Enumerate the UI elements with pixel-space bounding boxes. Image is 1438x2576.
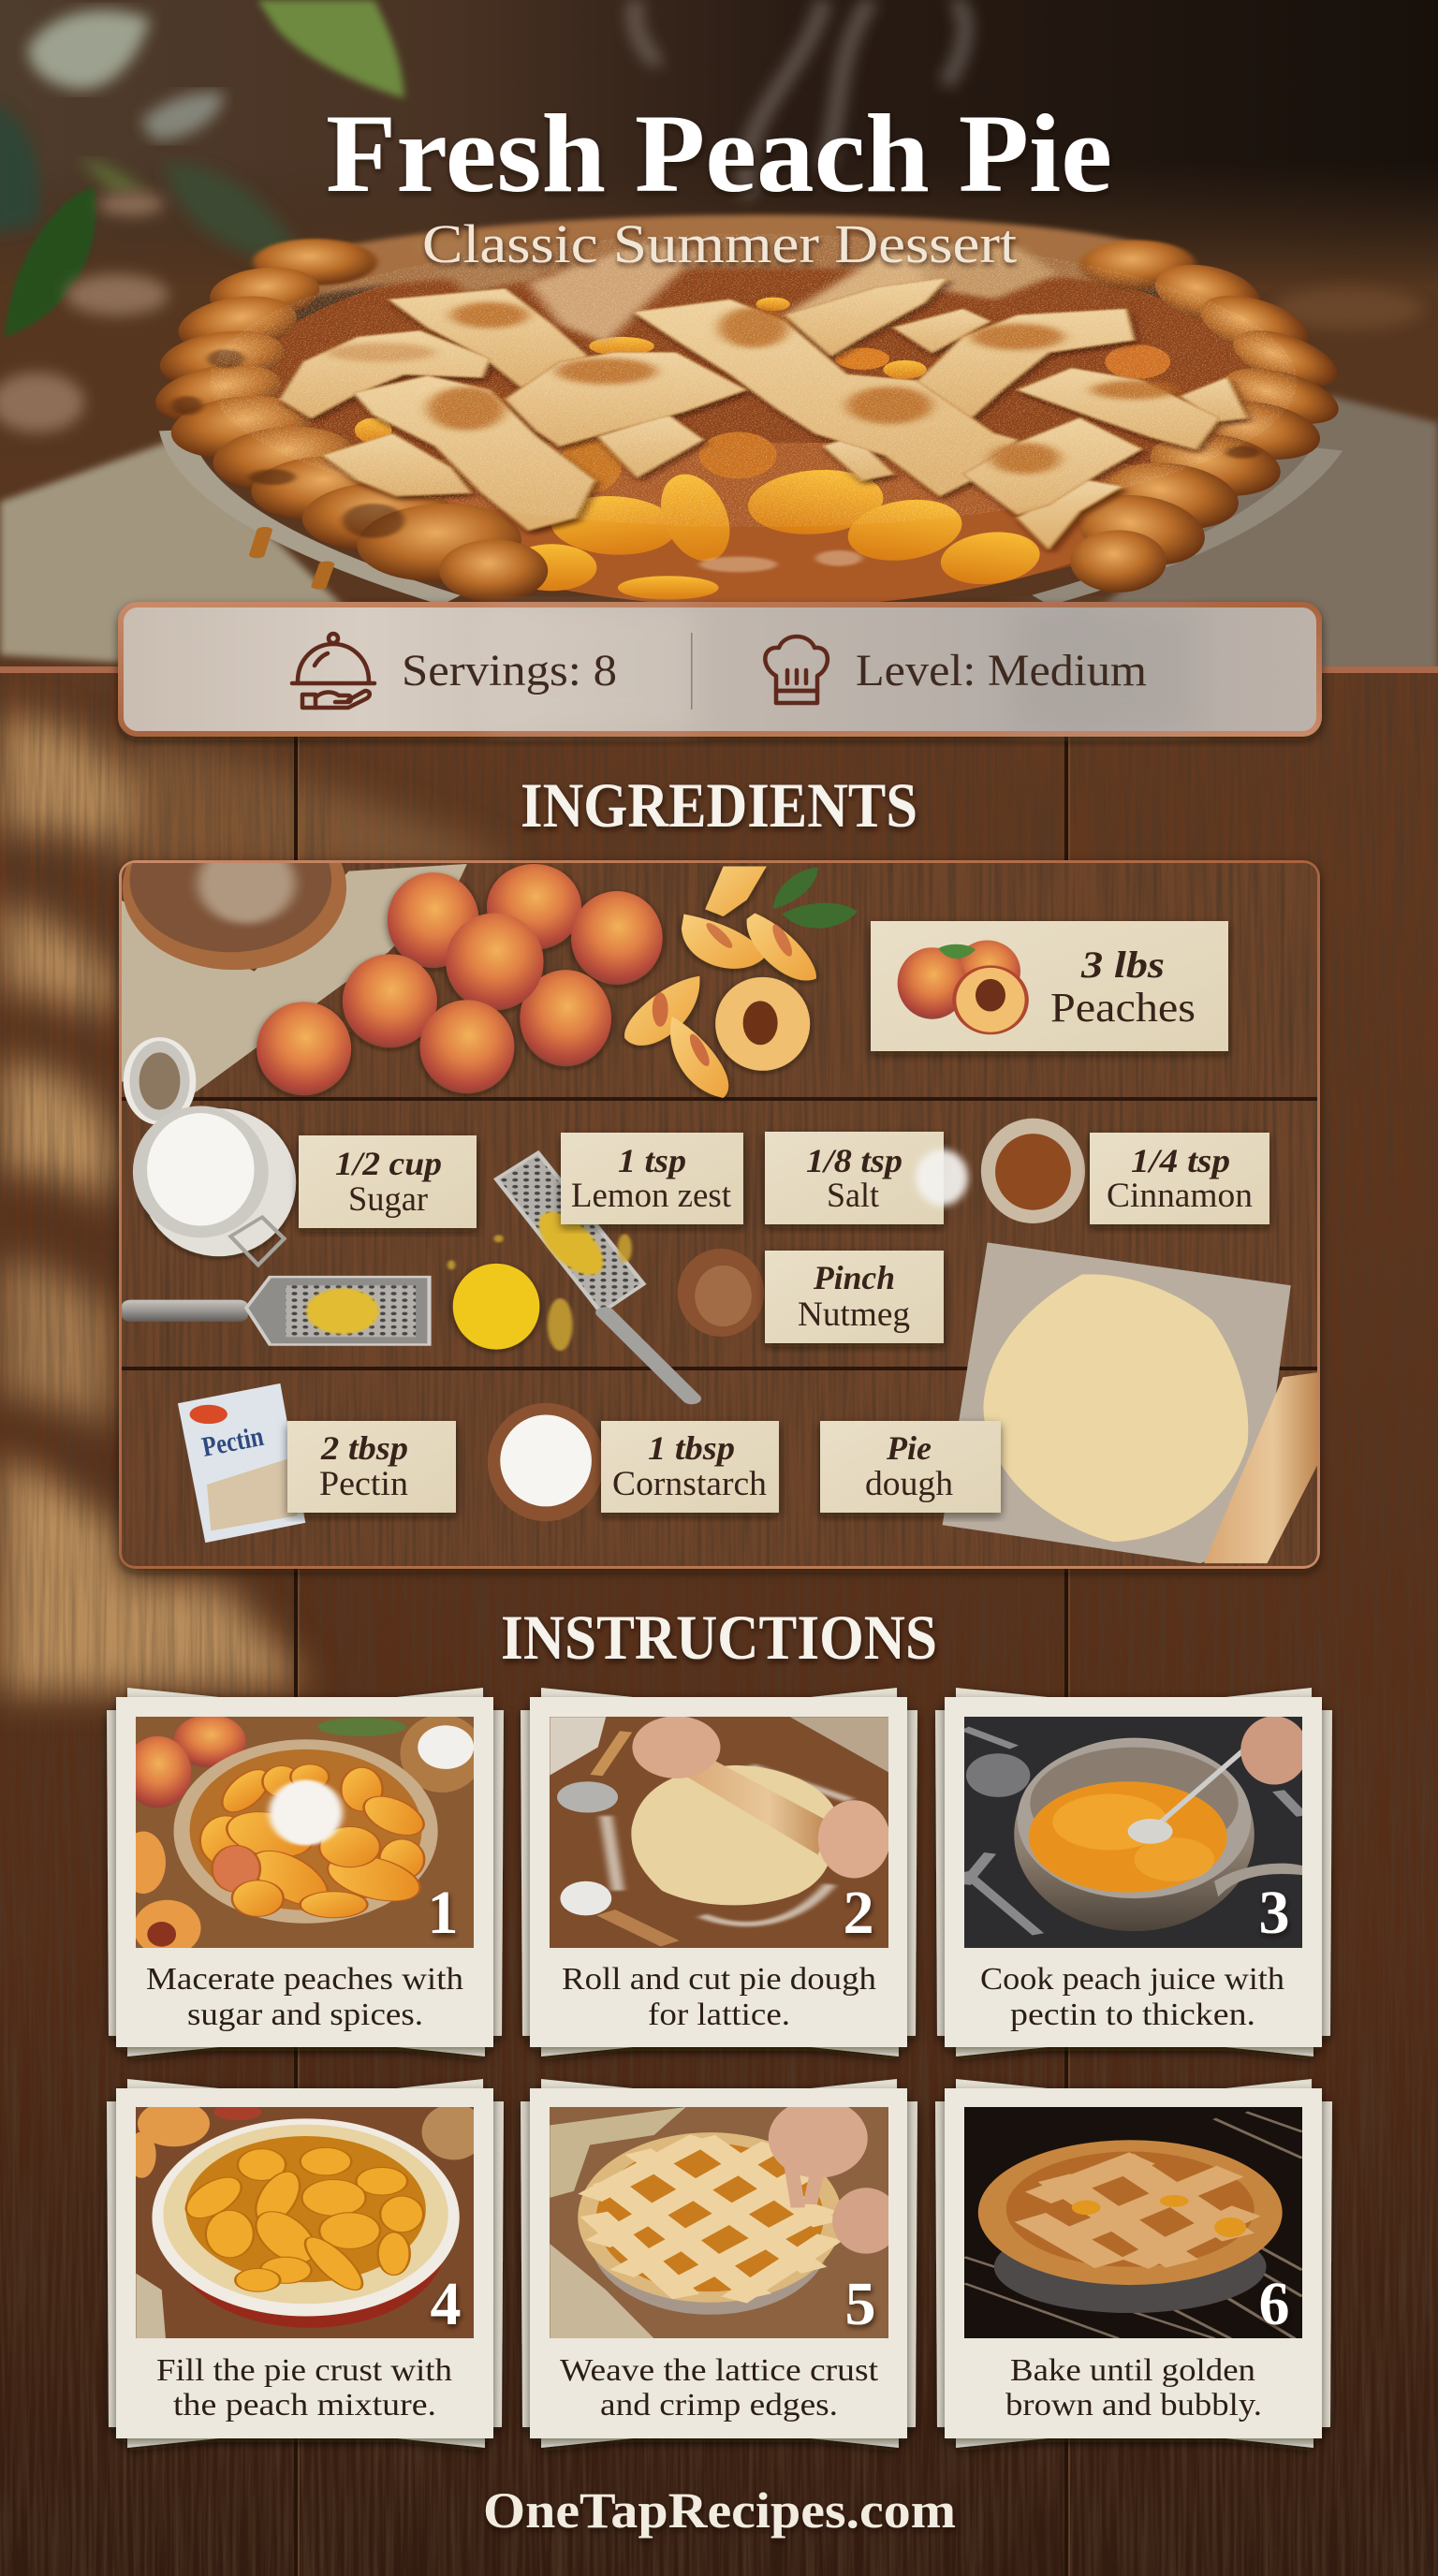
icon: nutmeg bowl xyxy=(678,1249,764,1337)
ingredient label: nutmeg xyxy=(765,1251,944,1343)
hero photo: fresh peach pie on a table xyxy=(0,0,1438,674)
step text: the peach mixture. xyxy=(173,2388,436,2422)
icon: flat grater with zest xyxy=(122,1277,429,1345)
step card 5 xyxy=(521,2079,917,2448)
step card 3 xyxy=(935,1688,1332,2056)
cloth xyxy=(0,396,1438,674)
ingredient label: sugar xyxy=(299,1135,477,1228)
ingredient label: 3 lbs peaches: 3 lbs xyxy=(1080,944,1165,986)
ingredient label: pectin: 2 tbsp xyxy=(320,1429,408,1467)
icon: serving cloche on a hand xyxy=(292,634,374,708)
divider xyxy=(691,633,693,710)
ingredient label: cinnamon: Cinnamon xyxy=(1107,1177,1253,1215)
subtitle: Classic Summer Dessert xyxy=(422,213,1017,274)
icon: lemon xyxy=(453,1264,539,1350)
icon: rolling pin xyxy=(1204,1372,1318,1563)
icon: cornstarch bowl xyxy=(488,1403,604,1521)
step text: Macerate peaches with xyxy=(146,1962,463,1997)
photo: peaches macerating in a bowl xyxy=(121,1715,483,1956)
tin rim xyxy=(174,431,1328,600)
photo: filled pie crust xyxy=(127,2100,486,2338)
ingredient label: lemon zest xyxy=(561,1133,743,1224)
icon: pectin packet xyxy=(178,1383,305,1543)
panel: servings and level banner xyxy=(121,605,1319,734)
step text xyxy=(156,2353,452,2422)
step card 2 xyxy=(521,1688,917,2056)
footer website: OneTapRecipes.com xyxy=(483,2482,956,2539)
icon: wooden bowl xyxy=(123,806,346,970)
photo: rolling pie dough xyxy=(550,1716,890,1948)
step text xyxy=(562,1962,876,2032)
panel: ingredients board xyxy=(119,806,1320,1569)
dappled sunlight on wood xyxy=(0,716,524,1694)
step text: Cook peach juice with xyxy=(980,1962,1284,1997)
step text xyxy=(1005,2353,1262,2422)
heading: instructions: INSTRUCTIONS xyxy=(501,1602,937,1673)
ingredient label: 3 lbs peaches xyxy=(871,921,1228,1051)
icon: blurred leaves behind the pie xyxy=(0,0,404,337)
icon: linen cloth xyxy=(120,864,467,1095)
step number: 6 xyxy=(1258,2270,1290,2338)
step number: 5 xyxy=(844,2270,876,2338)
ingredient label: lemon zest: Lemon zest xyxy=(571,1177,732,1215)
ingredient label: cornstarch: 1 tbsp xyxy=(648,1429,735,1467)
ingredient label: cinnamon: 1/4 tsp xyxy=(1131,1142,1230,1179)
step text: Weave the lattice crust xyxy=(560,2353,879,2388)
ingredient label: cornstarch: Cornstarch xyxy=(612,1465,767,1503)
zest crumbs xyxy=(448,1234,632,1351)
photo: pie baking in the oven xyxy=(964,2107,1302,2338)
ingredient label: cinnamon xyxy=(1090,1133,1269,1224)
step text: sugar and spices. xyxy=(187,1998,423,2032)
panel: ingredients board: Pectin xyxy=(199,1421,266,1463)
step card 6 xyxy=(935,2079,1332,2448)
title: Fresh Peach Pie xyxy=(326,91,1112,215)
crimped crust lobes xyxy=(129,239,1362,602)
step text: pectin to thicken. xyxy=(1010,1998,1255,2032)
ingredient label: 3 lbs peaches: Peaches xyxy=(1050,985,1196,1031)
ingredient label: pie dough xyxy=(820,1421,1001,1513)
icon: salt pile xyxy=(916,1149,968,1206)
ingredient label: pie dough: Pie xyxy=(886,1429,932,1467)
step text: brown and bubbly. xyxy=(1005,2388,1262,2422)
ingredient label: sugar: Sugar xyxy=(348,1180,428,1219)
ingredient label: nutmeg: Nutmeg xyxy=(798,1295,910,1334)
sun spots on table xyxy=(0,193,1423,432)
step text: and crimp edges. xyxy=(600,2388,838,2422)
photo: weaving the lattice xyxy=(550,2099,900,2338)
photo: cooking peach juice in a pot xyxy=(964,1716,1308,1948)
step text xyxy=(560,2353,879,2422)
back crust and lattice, out of focus xyxy=(296,214,1181,356)
heading: ingredients: INGREDIENTS xyxy=(521,769,917,841)
icon: whole peaches xyxy=(257,864,663,1095)
browned patches xyxy=(327,302,1177,474)
icon: cinnamon bowl xyxy=(981,1119,1085,1223)
icon: sugar jar xyxy=(126,1039,296,1265)
step card 1 xyxy=(107,1688,504,2056)
ingredient label: cornstarch xyxy=(601,1421,779,1513)
ingredient label: salt: 1/8 tsp xyxy=(806,1142,902,1179)
steam xyxy=(635,0,965,197)
step text xyxy=(980,1962,1284,2032)
step text xyxy=(146,1962,463,2032)
step number: 1 xyxy=(427,1879,459,1947)
step text: Bake until golden xyxy=(1010,2353,1255,2388)
copper divider lines beside the banner xyxy=(0,666,1438,673)
ingredient label: sugar: 1/2 cup xyxy=(335,1145,442,1182)
step text: Roll and cut pie dough xyxy=(562,1962,876,1997)
icon: peach leaves xyxy=(773,868,858,929)
ingredient label: lemon zest: 1 tsp xyxy=(618,1142,686,1179)
ingredient label: salt: Salt xyxy=(827,1177,880,1215)
step number: 4 xyxy=(431,2270,461,2338)
icon: chef hat xyxy=(765,637,828,703)
icon: peach slices and halves xyxy=(624,867,816,1098)
step number: 2 xyxy=(843,1879,874,1947)
ingredient label: salt xyxy=(765,1132,944,1224)
step text: Fill the pie crust with xyxy=(156,2353,452,2388)
step card 4 xyxy=(107,2079,504,2448)
step text: for lattice. xyxy=(648,1998,790,2032)
ingredient label: pectin: Pectin xyxy=(319,1465,408,1503)
step number: 3 xyxy=(1258,1879,1290,1947)
ingredient label: pie dough: dough xyxy=(865,1465,954,1503)
icon: parchment and pie dough xyxy=(943,1242,1291,1563)
pie xyxy=(129,214,1362,608)
servings text: Servings: 8 xyxy=(402,646,617,695)
icon: standing grater xyxy=(496,1153,692,1398)
ingredient label: pectin xyxy=(287,1421,456,1513)
lattice strips xyxy=(280,278,1246,549)
level text: Level: Medium xyxy=(856,646,1147,695)
ingredient label: nutmeg: Pinch xyxy=(813,1259,895,1296)
